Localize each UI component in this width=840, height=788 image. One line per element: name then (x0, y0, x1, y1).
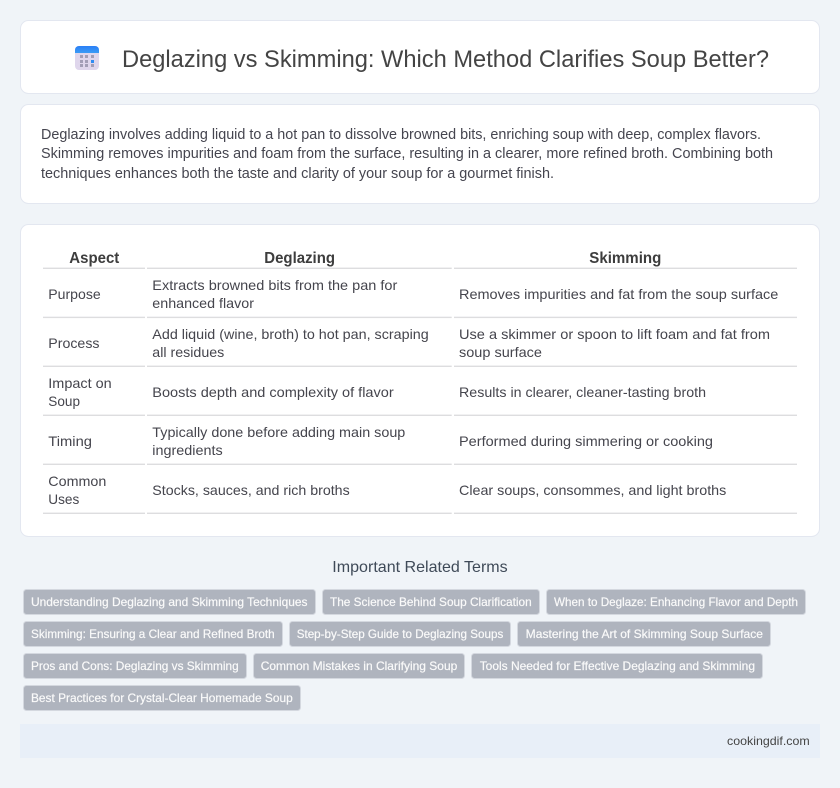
row: common uses: Uses (48, 491, 79, 507)
header panel (20, 20, 820, 94)
row: process: all residues (152, 344, 224, 360)
row: process: soup surface (459, 344, 542, 360)
tag (24, 654, 246, 678)
row: impact on soup (48, 375, 706, 409)
tag: Pros and Cons: Deglazing vs Skimming (31, 659, 239, 673)
row: impact on soup: Boosts depth and complexity of flavor (152, 384, 394, 400)
tag: Step-by-Step Guide to Deglazing Soups (297, 627, 503, 641)
row: timing: Performed during simmering or cooking (459, 433, 713, 449)
row: process: Use a skimmer or spoon to lift foam and fat from (459, 326, 770, 342)
row: process: Add liquid (wine, broth) to hot pan, scraping (152, 326, 429, 342)
description text: Deglazing involves adding liquid to a hot pan to dissolve browned bits, enriching soup with deep, complex flavors. (41, 127, 761, 143)
tag: When to Deglaze: Enhancing Flavor and Depth (554, 595, 798, 609)
row: impact on soup: Impact on (48, 375, 112, 391)
panel: description (20, 104, 820, 204)
title: Deglazing vs Skimming: Which Method Clarifies Soup Better? (122, 46, 769, 73)
row: common uses: Stocks, sauces, and rich broths (152, 482, 350, 498)
tag (254, 654, 464, 678)
tag (24, 622, 282, 646)
tag: Skimming: Ensuring a Clear and Refined Broth (31, 627, 275, 641)
row: timing: ingredients (152, 442, 223, 458)
footer (20, 724, 820, 758)
tag: The Science Behind Soup Clarification (330, 595, 532, 609)
row: timing (48, 424, 713, 458)
row: timing: Timing (48, 433, 92, 449)
tag: Tools Needed for Effective Deglazing and Skimming (480, 659, 755, 673)
row: process: Process (48, 335, 100, 351)
row: impact on soup: Soup (48, 393, 80, 409)
table header row: Deglazing (264, 250, 335, 267)
row: purpose: Extracts browned bits from the pan for (152, 277, 398, 293)
panel: comparison table (20, 224, 820, 536)
tag (518, 622, 770, 646)
icon: calendar (75, 46, 99, 70)
tag: Understanding Deglazing and Skimming Techniques (31, 595, 308, 609)
heading: important related terms: Important Related Terms (332, 559, 508, 576)
row: common uses (48, 473, 726, 507)
tag (24, 686, 300, 710)
tag (472, 654, 762, 678)
tag (546, 590, 806, 614)
tag: Common Mistakes in Clarifying Soup (261, 659, 458, 673)
tag (290, 622, 510, 646)
related term tags (24, 590, 806, 710)
tag: Mastering the Art of Skimming Soup Surface (526, 627, 763, 641)
table header row (69, 250, 661, 267)
row: purpose (48, 277, 779, 311)
description text: techniques enhances both the taste and clarity of your soup for a gourmet finish. (41, 166, 554, 182)
description text: Skimming removes impurities and foam from the surface, resulting in a clearer, more refined broth. Combining both (41, 146, 773, 162)
row: common uses: Clear soups, consommes, and light broths (459, 482, 726, 498)
row: timing: Typically done before adding main soup (152, 424, 406, 440)
footer: cookingdif.com (727, 734, 810, 748)
table header row: Aspect (69, 250, 120, 267)
row: purpose: Purpose (48, 286, 101, 302)
row: purpose: Removes impurities and fat from the soup surface (459, 286, 779, 302)
tag (24, 590, 316, 614)
table header row: Skimming (589, 250, 661, 267)
row: process (48, 326, 770, 360)
tag (322, 590, 540, 614)
tag: Best Practices for Crystal-Clear Homemade Soup (31, 691, 293, 705)
row: impact on soup: Results in clearer, cleaner-tasting broth (459, 384, 706, 400)
row: purpose: enhanced flavor (152, 295, 254, 311)
description text (41, 127, 773, 182)
row: common uses: Common (48, 473, 106, 489)
